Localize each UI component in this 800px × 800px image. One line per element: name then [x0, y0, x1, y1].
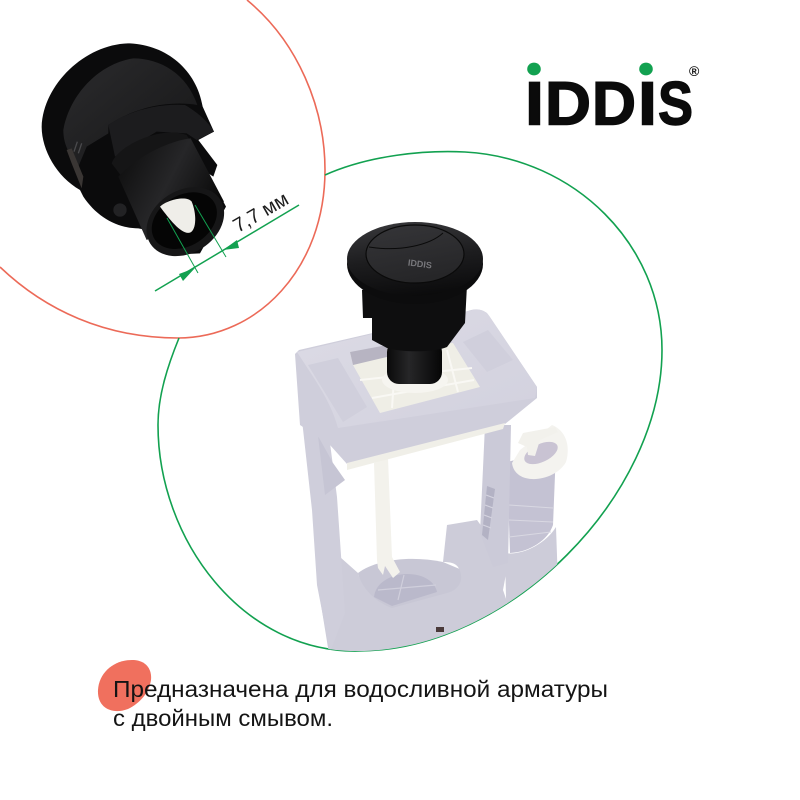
right overflow tube: [506, 425, 568, 604]
wordmark: D: [545, 70, 591, 138]
button logo: IDDIS: [407, 258, 432, 270]
green dot right: [639, 63, 653, 75]
infographic canvas: [0, 0, 700, 731]
green dot left: [527, 63, 541, 75]
side hole: [113, 203, 127, 217]
base with U cut-out: [322, 520, 508, 651]
top frame: [295, 309, 537, 470]
dimension label: 7,7 мм: [230, 188, 292, 237]
extension lines: [167, 205, 226, 273]
registered mark: ®: [689, 63, 700, 79]
line 2: с двойным смывом.: [113, 705, 333, 731]
collar: [108, 105, 214, 157]
wordmark: I: [638, 70, 657, 138]
green circle outline: [158, 152, 662, 651]
dimension marker: [155, 188, 299, 291]
arrowheads: [179, 240, 239, 281]
silhouette: [42, 43, 226, 255]
nozzle end: [134, 173, 237, 270]
description text: [113, 676, 608, 731]
logo: IDDIS: [525, 63, 700, 138]
nozzle tube: [118, 138, 224, 240]
photo: button close-up: [42, 43, 237, 270]
red circle outline: [0, 0, 325, 338]
wordmark: I: [525, 70, 544, 138]
coral accent blob: [98, 660, 151, 711]
wordmark: [525, 70, 693, 138]
side clip: [67, 148, 83, 188]
nozzle ring: [112, 132, 197, 177]
wordmark: S: [658, 70, 693, 138]
photo: drain valve frame with button: [295, 222, 568, 660]
flange inner face: [63, 58, 197, 167]
vent slots: [74, 142, 82, 153]
line 1: Предназначена для водосливной арматуры: [113, 676, 608, 702]
left leg: [302, 427, 342, 650]
black flush button: [347, 222, 483, 384]
dimension line: [155, 205, 299, 291]
white lever rod: [374, 458, 400, 578]
cream strip under frame: [347, 423, 505, 470]
left leg brace: [318, 436, 345, 495]
wordmark: D: [592, 70, 636, 138]
white pin: [160, 199, 195, 233]
right leg: [480, 425, 511, 567]
